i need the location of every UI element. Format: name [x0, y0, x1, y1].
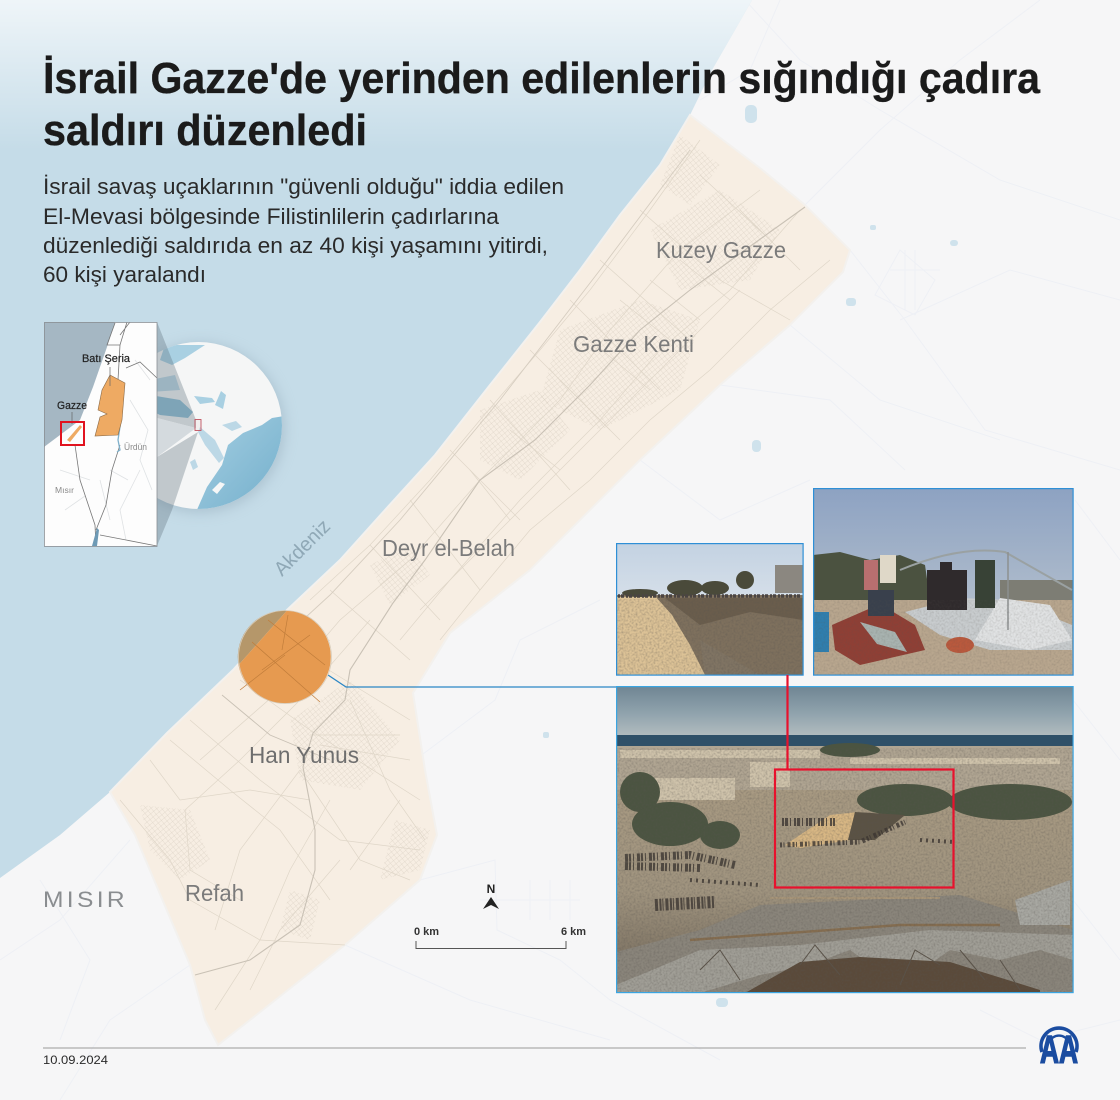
map labels: Refah [185, 880, 244, 906]
subtitle text: düzenlediği saldırıda en az 40 kişi yaşamını yitirdi, [43, 233, 548, 258]
map labels: Kuzey Gazze [656, 237, 786, 263]
attack location circle and leader [238, 610, 616, 704]
subtitle text: 60 kişi yaralandı [43, 262, 206, 287]
map labels: Akdeniz [270, 515, 335, 581]
north arrow: N [487, 882, 495, 896]
north arrow [483, 882, 499, 909]
photo: aerial view of strike site [616, 686, 1073, 993]
map labels: Han Yunus [249, 742, 359, 768]
map: Gaza Strip [110, 115, 850, 1045]
photo: destroyed tents [813, 488, 1073, 675]
title: İsrail Gazze'de yerinden edilenlerin sığındığı çadıra [43, 54, 1040, 103]
locator globe [158, 341, 287, 515]
photo: crater [616, 543, 803, 675]
logo: Anadolu Agency: AA [1040, 1029, 1078, 1072]
map labels [43, 237, 786, 912]
inset map: Batı Şeria [82, 353, 131, 365]
map labels: Deyr el-Belah [382, 535, 515, 561]
title: saldırı düzenledi [43, 106, 367, 155]
inset map: Mısır [55, 485, 74, 495]
logo: Anadolu Agency [1040, 1028, 1078, 1072]
inset map [44, 322, 157, 546]
inset map: Gazze [57, 400, 87, 412]
zoom cone from globe to inset [157, 322, 201, 546]
map labels: Gazze Kenti [573, 331, 694, 357]
red callout box linking photos [775, 675, 954, 888]
subtitle text [43, 174, 564, 287]
inset map: Ürdün [124, 442, 147, 453]
scale bar: 6 km [561, 926, 586, 938]
title [43, 54, 1040, 155]
scale bar [414, 926, 586, 948]
subtitle text: İsrail savaş uçaklarının "güvenli olduğu" iddia edilen [43, 174, 564, 199]
footer rule and date: 10.09.2024 [43, 1053, 108, 1067]
subtitle text: El-Mevasi bölgesinde Filistinlilerin çadırlarına [43, 204, 499, 229]
sea: Akdeniz [0, 0, 752, 878]
map labels: MISIR [43, 887, 128, 912]
scale bar: 0 km [414, 926, 439, 938]
